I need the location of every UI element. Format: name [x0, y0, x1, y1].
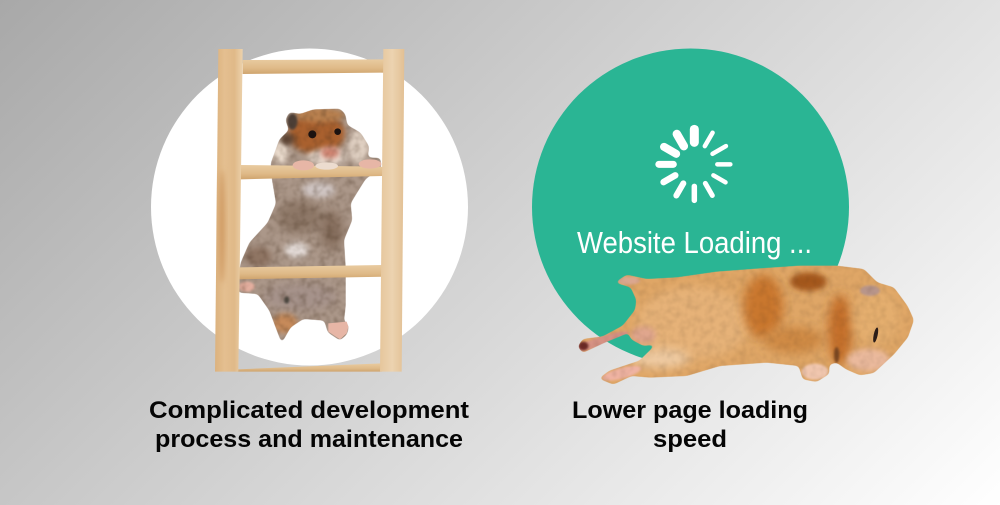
loading label: Website Loading ... — [577, 225, 812, 260]
hamster eyes — [308, 128, 341, 138]
teal circle — [532, 48, 849, 366]
caption: lower page loading speed — [572, 397, 808, 453]
caption: complicated development: process and maintenance — [155, 426, 463, 453]
hamster closed eye — [872, 327, 879, 343]
panel: lower page loading speed — [532, 48, 920, 387]
panel: complicated development — [151, 48, 468, 372]
loading spinner icon — [659, 129, 730, 200]
ladder rungs over hamster — [239, 165, 383, 279]
lying hamster — [570, 263, 920, 387]
caption: lower page loading speed: speed — [653, 426, 727, 453]
caption: complicated development: Complicated development — [149, 397, 469, 424]
caption: lower page loading speed: Lower page loading — [572, 397, 808, 424]
ladder back rungs — [237, 59, 384, 372]
hamster body — [239, 108, 382, 340]
ladder rails — [215, 49, 404, 372]
caption: complicated development — [149, 397, 469, 453]
hamster body — [570, 263, 920, 387]
white circle — [151, 48, 468, 366]
hamster paws and chin — [293, 159, 381, 339]
ladder and climbing hamster — [215, 49, 404, 372]
